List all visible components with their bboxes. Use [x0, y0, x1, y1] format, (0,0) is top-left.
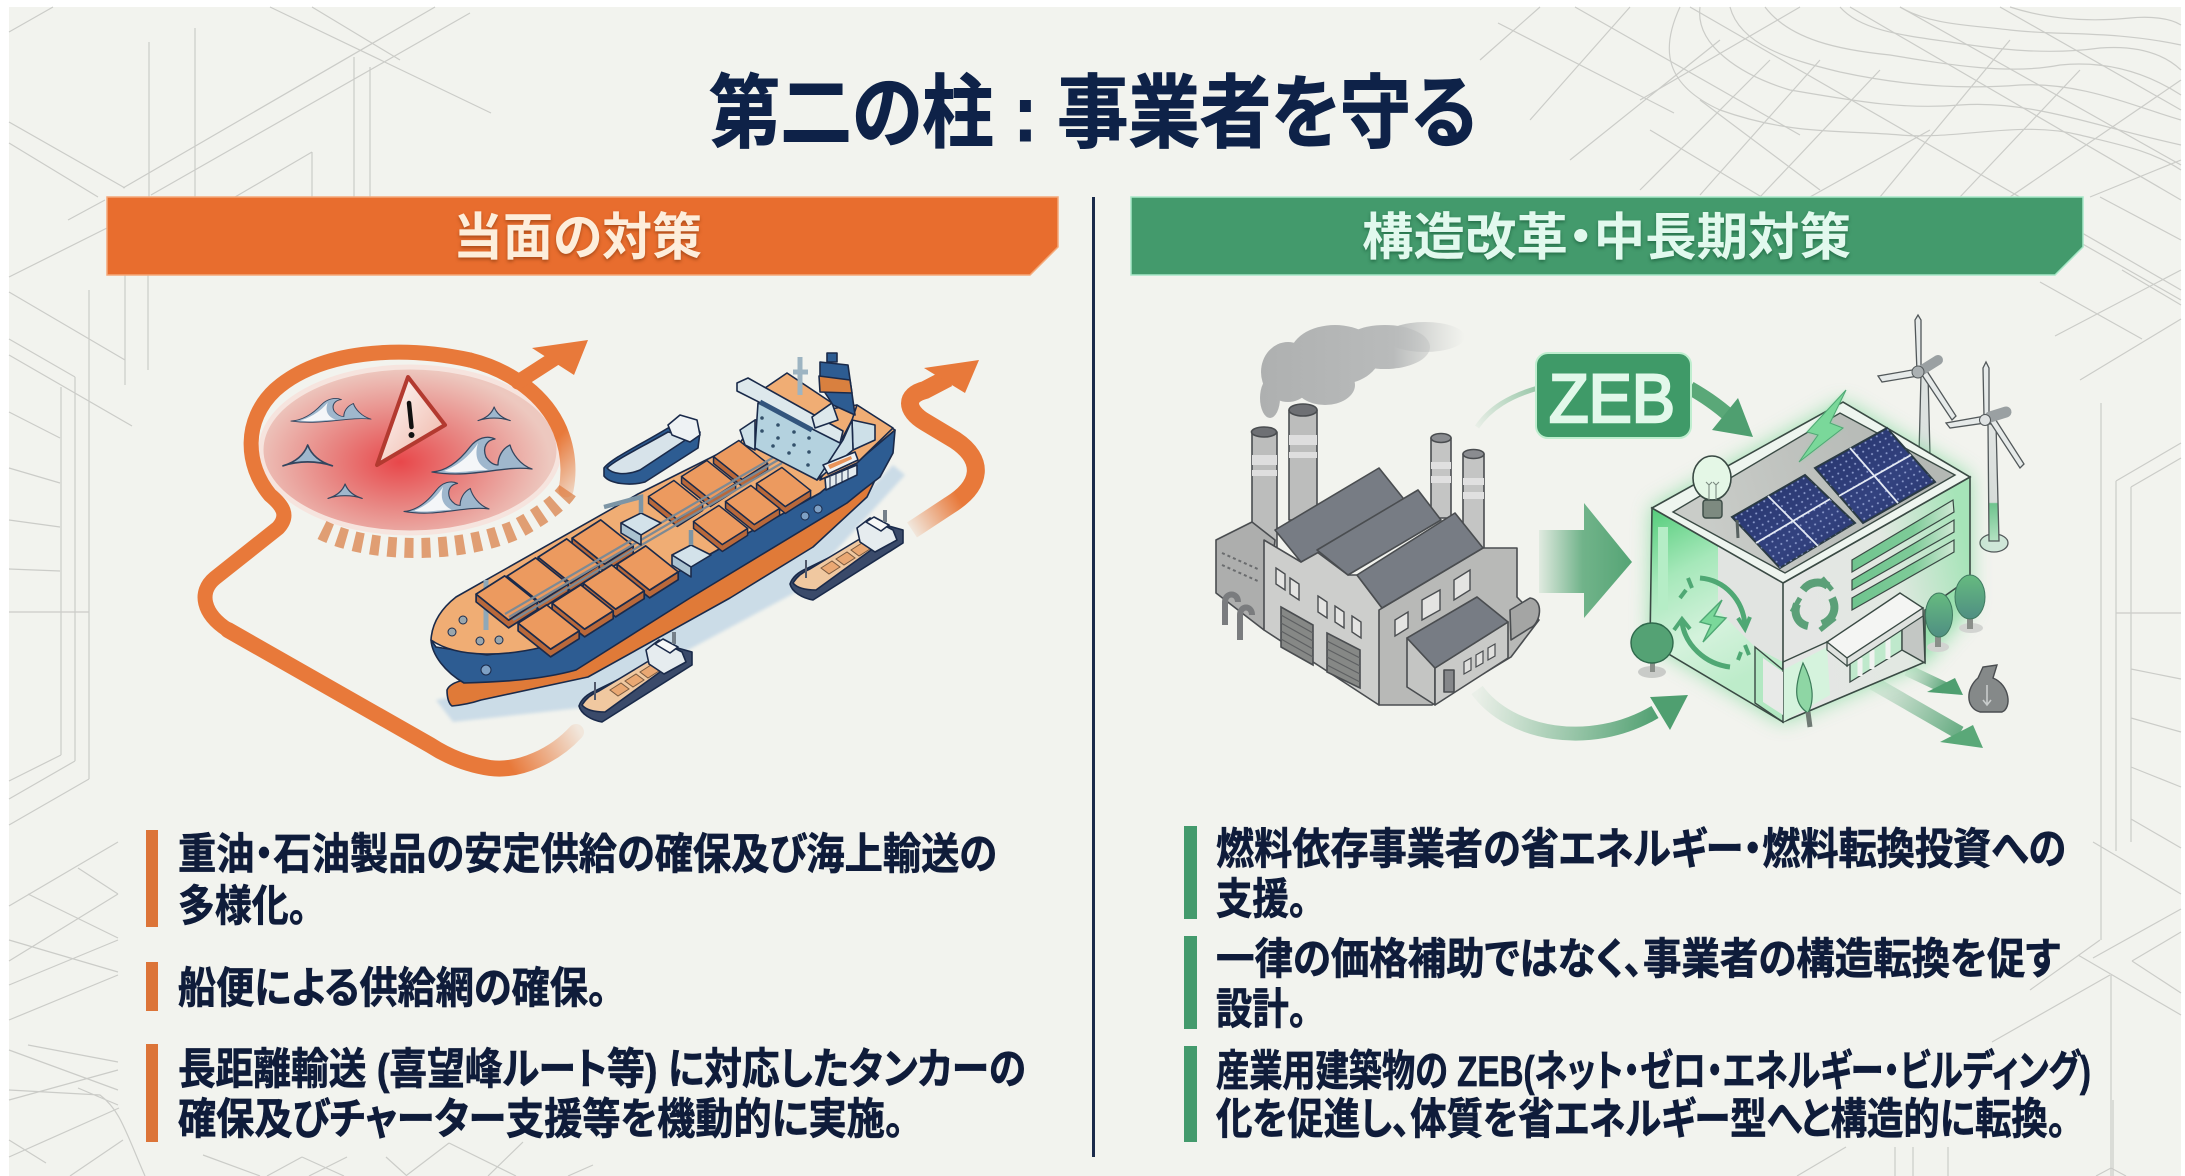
bullet 3: 確保及びチャーター支援等を機動的に実施。	[178, 1096, 904, 1144]
hatch	[322, 490, 568, 548]
bullet 2: 一律の価格補助ではなく、事業者の構造転換を促す	[1216, 936, 2060, 984]
roofs	[1275, 468, 1407, 562]
tanker shadow	[436, 465, 905, 722]
bullet 1	[146, 830, 997, 931]
small ship: right	[790, 510, 903, 600]
waves	[283, 398, 532, 513]
title: 第二の柱 : 事業者を守る	[709, 69, 1477, 158]
catwalk pipes	[505, 457, 782, 620]
main tanker	[431, 353, 895, 706]
entrance canopy	[1827, 593, 1925, 682]
windows	[1276, 568, 1470, 638]
bullet 1: 多様化。	[178, 883, 307, 931]
bullet 1	[1184, 826, 2066, 924]
big arrow	[1539, 503, 1632, 618]
heading: structural reform: 構造改革・中長期対策	[1362, 209, 1851, 266]
trees	[1631, 575, 1985, 727]
arrows to and from ZEB badge	[1477, 388, 1983, 748]
bullet 2: 設計。	[1216, 986, 1307, 1034]
bullet 3	[1184, 1046, 2091, 1144]
panel: immediate measures	[107, 197, 1058, 1144]
smoke	[1260, 322, 1465, 418]
bullet 1: 燃料依存事業者の省エネルギー・燃料転換投資への	[1216, 826, 2066, 874]
circular energy icon	[1674, 578, 1750, 667]
bullet list: structural reform	[1184, 826, 2091, 1144]
bullet 3: 長距離輸送 (喜望峰ルート等) に対応したタンカーの	[178, 1046, 1026, 1094]
warning triangle	[377, 377, 445, 465]
wind turbines	[1878, 315, 2024, 552]
bullet 2	[1184, 936, 2060, 1034]
pipes	[1225, 594, 1252, 640]
illustration: factory to ZEB	[1216, 315, 2024, 748]
small ship: top	[604, 415, 700, 484]
chimneys	[1252, 404, 1484, 549]
recycle mark	[1792, 578, 1835, 630]
bullet 1: 支援。	[1216, 876, 1307, 924]
annex	[1407, 638, 1435, 705]
ZEB building	[1650, 402, 1970, 722]
walls	[1216, 522, 1275, 630]
heading: immediate measures: 当面の対策	[453, 209, 702, 266]
factory	[1216, 404, 1539, 705]
route arrow: right	[910, 360, 979, 530]
bullet list: immediate measures	[146, 830, 1026, 1144]
center divider	[1092, 197, 1095, 1157]
route ring and arrow	[205, 352, 576, 769]
walls	[1650, 508, 1783, 722]
arrow head	[532, 340, 588, 375]
roof	[1652, 402, 1970, 583]
ZEB badge: ZEB	[1549, 360, 1675, 437]
deck cranes	[604, 497, 711, 577]
heading: structural reform	[1131, 197, 2083, 275]
light bulb	[1693, 456, 1731, 518]
cargo hatches	[476, 440, 811, 657]
trash bag	[1969, 665, 2008, 712]
panel: structural reform	[1131, 197, 2091, 1144]
bullet 1: 重油・石油製品の安定供給の確保及び海上輸送の	[178, 831, 997, 879]
bullet 3	[146, 1044, 1026, 1144]
small ship: bottom	[579, 632, 692, 722]
heading: immediate measures	[107, 197, 1058, 275]
garage doors	[1281, 607, 1360, 688]
solar panels	[1732, 428, 1935, 568]
side tank	[1510, 598, 1539, 640]
superstructure	[737, 353, 893, 490]
vents	[1852, 500, 1954, 610]
roof lightning	[1799, 390, 1846, 462]
illustration: shipping route and tanker	[205, 340, 979, 769]
danger zone disc	[261, 367, 568, 548]
bullet 2: 船便による供給網の確保。	[178, 965, 607, 1013]
